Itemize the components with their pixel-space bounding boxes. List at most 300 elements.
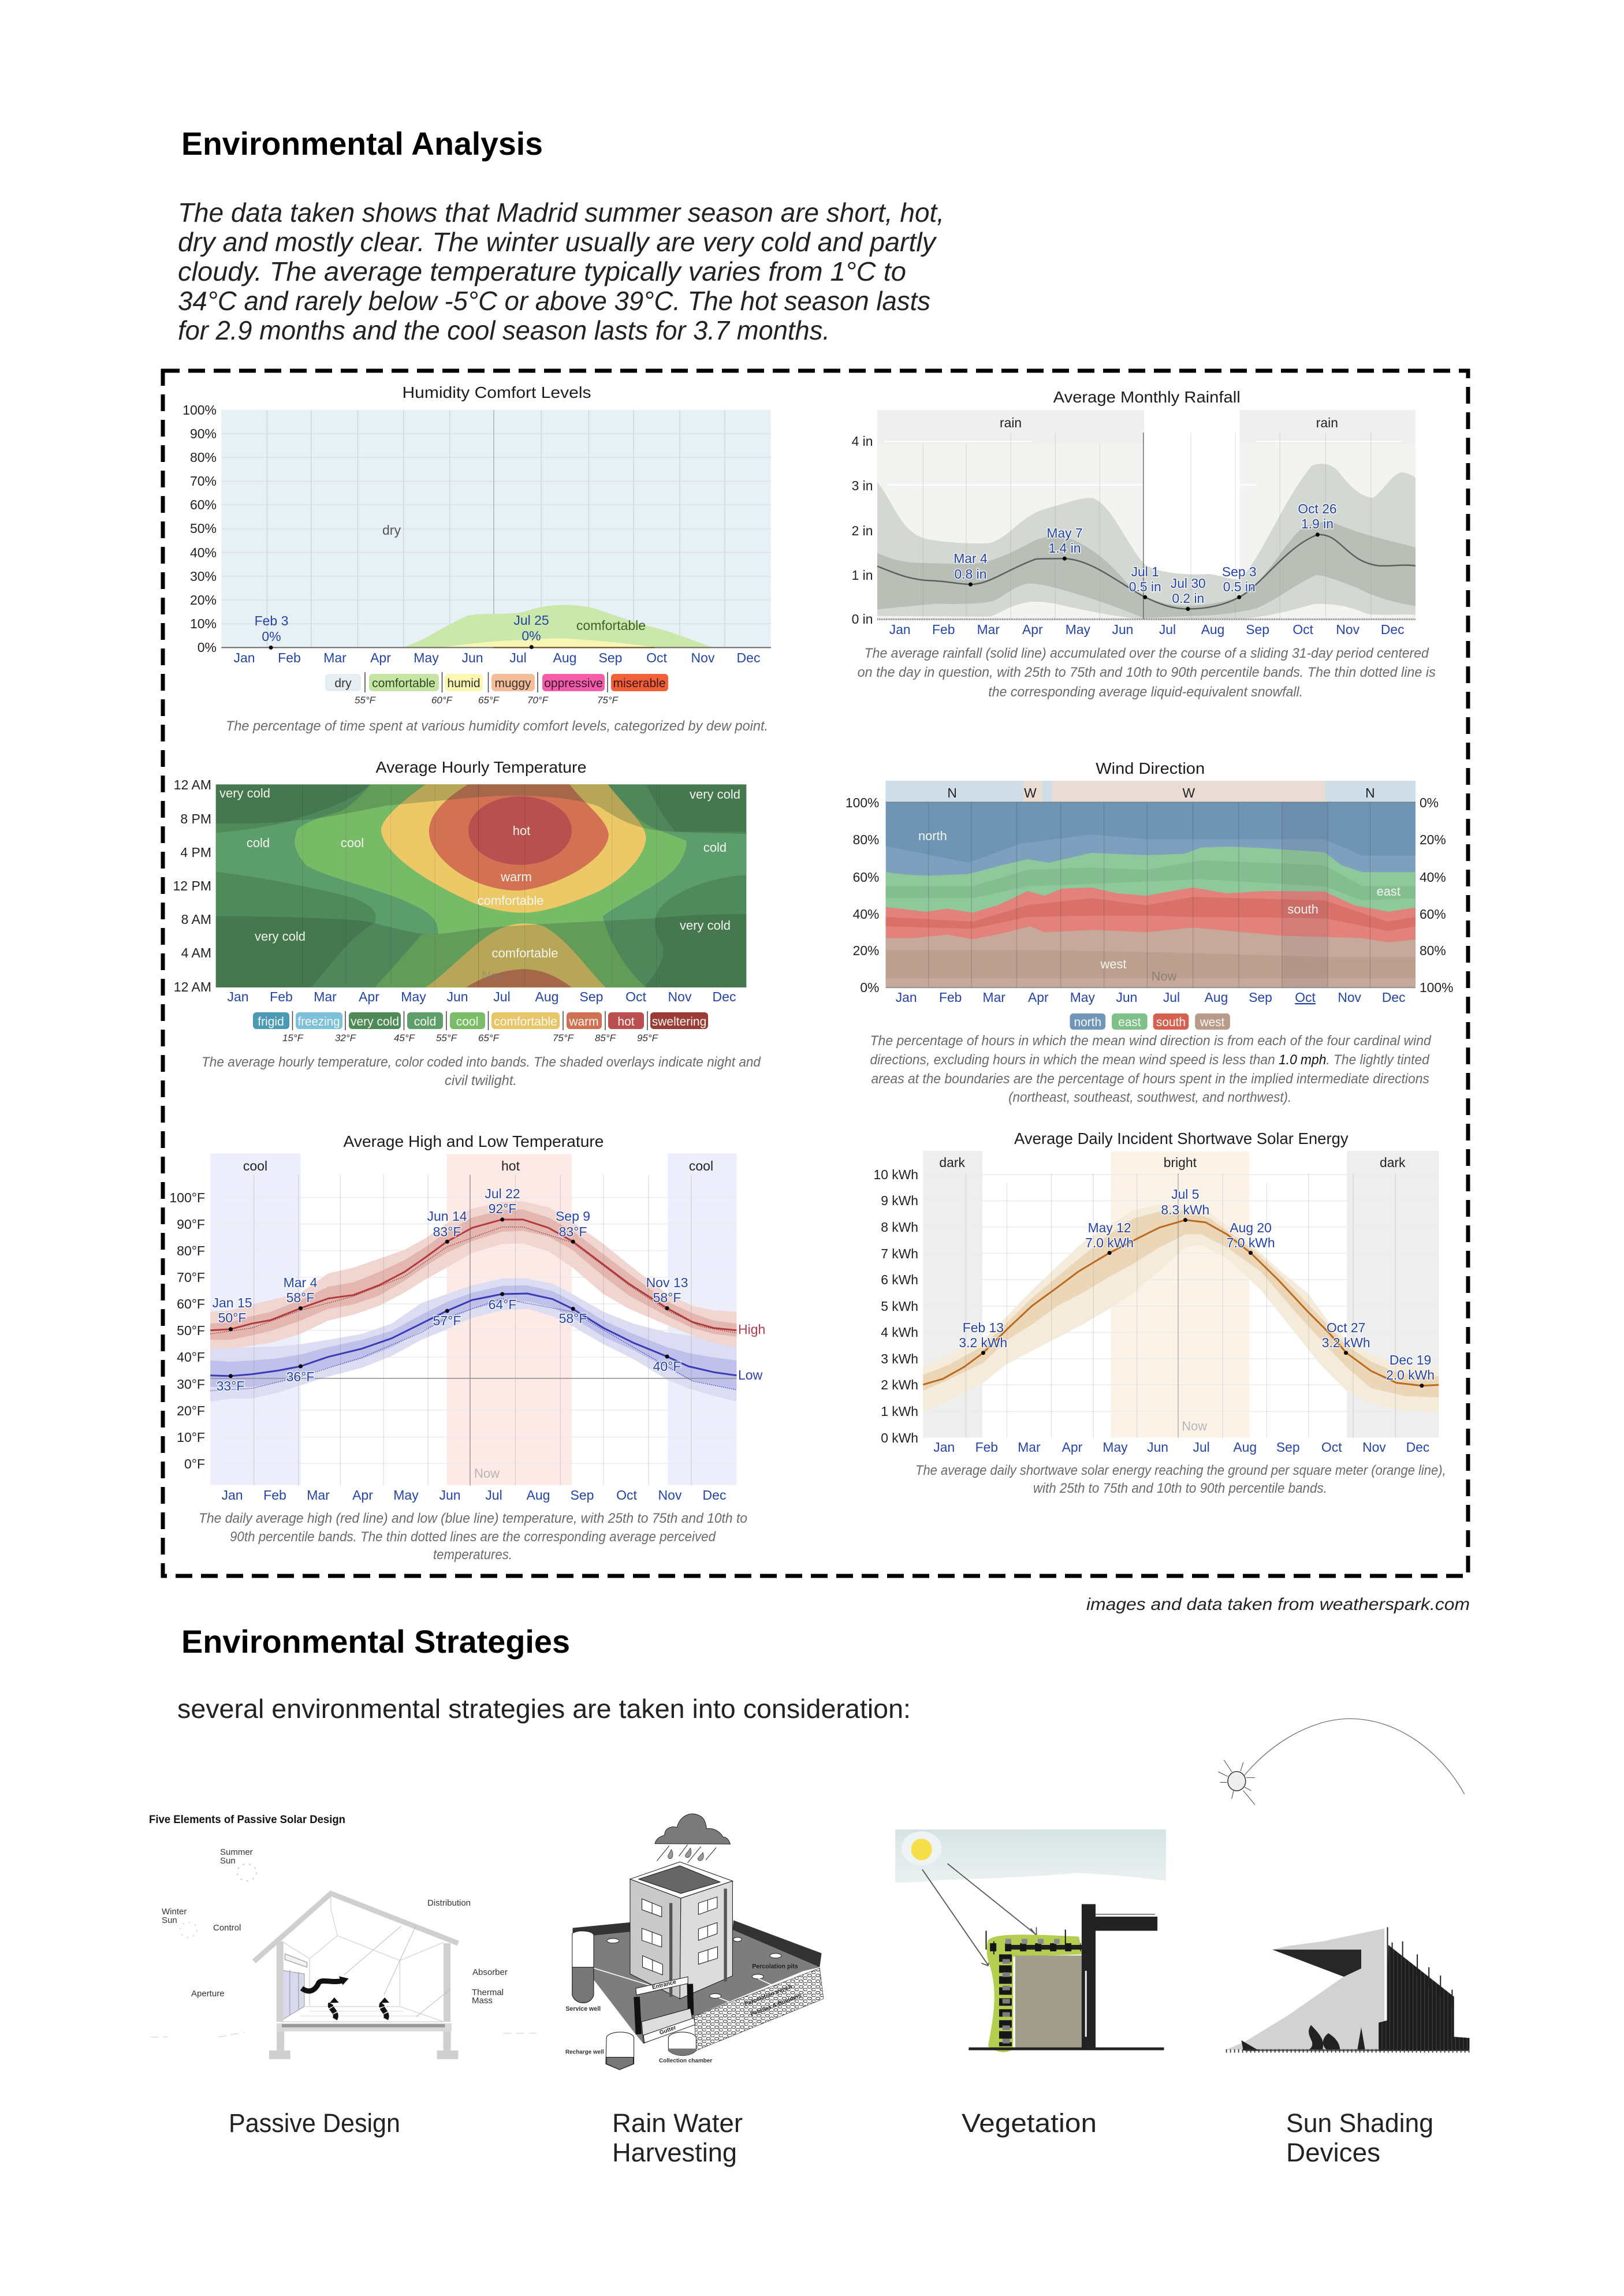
solar energy chart — [923, 1151, 1439, 1438]
intro text block: dry and mostly clear. The winter usually are very cold and partly — [178, 227, 937, 257]
chart title: hourly temperature: Average Hourly Temperature — [375, 758, 587, 776]
rainfall y axis: 2 in — [852, 523, 873, 538]
rainfall annotations: Jul 30 — [1171, 576, 1206, 591]
intro text block — [178, 197, 944, 345]
humidity y axis: 80% — [190, 450, 217, 465]
hourly band labels: comfortable — [478, 893, 543, 908]
heading: Environmental Analysis: Environmental Analysis — [181, 125, 543, 162]
solar months — [933, 1440, 1429, 1455]
rain diagram labels: Collection chamber — [659, 2058, 712, 2064]
wind left axis: 20% — [853, 943, 879, 958]
humidity legend: miserable — [613, 677, 666, 690]
rain diagram labels: Pebbles & Boulders — [750, 1992, 803, 2018]
wind left axis — [845, 795, 879, 995]
hourly caption: civil twilight. — [445, 1073, 517, 1089]
passive design diagram labels: Thermal — [472, 1988, 504, 1997]
solar y axis: 9 kWh — [881, 1193, 918, 1208]
wind header band: N — [1365, 785, 1375, 800]
wind months: Jun — [1116, 990, 1137, 1005]
solar y axis: 1 kWh — [881, 1404, 918, 1419]
solar months: Mar — [1018, 1440, 1041, 1455]
hourly months: Mar — [314, 989, 337, 1004]
heading: Environmental Strategies: Environmental Strategies — [181, 1623, 570, 1660]
humidity y axis: 50% — [190, 521, 217, 536]
wind header band: W — [1182, 785, 1195, 800]
wind caption: areas at the boundaries are the percentage of hours spent in the implied intermediate directions — [871, 1071, 1429, 1087]
hourly months: Aug — [535, 989, 558, 1004]
high low annotations: 83°F — [559, 1224, 587, 1239]
intro text block: The data taken shows that Madrid summer season are short, hot, — [178, 197, 944, 228]
hourly y axis: 4 AM — [181, 945, 211, 960]
wind direction labels: north — [918, 829, 947, 843]
solar y axis: 3 kWh — [881, 1351, 918, 1366]
high low y axis: 60°F — [177, 1296, 205, 1311]
solar y axis: 0 kWh — [881, 1430, 918, 1445]
rainfall annotations: Jul 1 — [1131, 564, 1159, 579]
high low y axis: 10°F — [177, 1430, 205, 1445]
wind months: Mar — [983, 990, 1005, 1005]
high low annotations: Low — [738, 1367, 763, 1382]
solar y axis: 4 kWh — [881, 1325, 918, 1340]
solar months: Jan — [933, 1440, 955, 1455]
wind left axis: 0% — [860, 980, 879, 995]
wind left axis: 80% — [853, 832, 879, 847]
wind direction labels: south — [1287, 902, 1318, 916]
rainfall season labels: rain — [1316, 415, 1338, 430]
high low annotations: 36°F — [286, 1369, 314, 1384]
rainfall months: Aug — [1201, 622, 1224, 637]
hourly legend: cool — [456, 1015, 478, 1028]
humidity legend: oppressive — [544, 677, 603, 690]
panel: average hourly temperature — [173, 758, 761, 1089]
rainfall annotations: 0.5 in — [1223, 579, 1256, 594]
solar caption — [915, 1463, 1446, 1496]
wind right axis: 0% — [1420, 795, 1439, 810]
rainfall y axis: 0 in — [852, 612, 873, 627]
hourly legend: frigid — [258, 1015, 284, 1028]
wind months: Nov — [1338, 990, 1362, 1005]
strategy label: vegetation: Vegetation — [962, 2108, 1097, 2138]
humidity legend — [325, 672, 668, 706]
rainfall months: Apr — [1022, 622, 1043, 637]
rainfall y axis: 3 in — [852, 478, 873, 493]
high low annotations: Jan 15 — [212, 1295, 252, 1310]
passive design diagram labels — [149, 1814, 508, 2006]
rainfall months: Dec — [1381, 622, 1405, 637]
solar annotations: Aug 20 — [1230, 1220, 1272, 1235]
hourly band labels: cold — [247, 836, 270, 850]
rainfall annotations: 0.2 in — [1172, 591, 1204, 606]
wind left axis: 60% — [853, 870, 879, 885]
hourly legend: 75°F — [553, 1033, 575, 1043]
solar months: Aug — [1233, 1440, 1257, 1455]
wells — [572, 1931, 696, 2070]
humidity annotations — [255, 523, 646, 644]
hourly legend: 32°F — [335, 1033, 357, 1043]
hourly legend: sweltering — [652, 1015, 706, 1028]
high low y axis: 30°F — [177, 1377, 205, 1392]
rainfall caption: on the day in question, with 25th to 75th and 10th to 90th percentile bands. The thin dotted line is — [858, 665, 1436, 680]
wind legend: south — [1156, 1016, 1186, 1029]
wind months — [896, 990, 1406, 1005]
passive design diagram labels: Distribution — [427, 1898, 471, 1908]
solar annotations: Dec 19 — [1390, 1352, 1431, 1367]
illustration: vegetation — [895, 1829, 1166, 2052]
site ground and back walls — [573, 1920, 822, 2044]
humidity months: Feb — [278, 650, 301, 665]
solar season labels: dark — [1380, 1155, 1406, 1170]
rainfall months — [889, 622, 1405, 637]
humidity legend: comfortable — [372, 677, 435, 690]
strategies intro text: several environmental strategies are taken into consideration: — [177, 1694, 911, 1724]
illustration: sun shading devices — [1218, 1719, 1469, 2051]
solar y axis: 5 kWh — [881, 1299, 918, 1314]
humidity months: Oct — [646, 650, 667, 665]
rainfall months: May — [1066, 622, 1091, 637]
solar y axis: 10 kWh — [874, 1167, 918, 1182]
strategy label: sun shading devices — [1286, 2108, 1433, 2167]
solar annotations: 2.0 kWh — [1386, 1367, 1435, 1382]
high low months: May — [393, 1488, 419, 1503]
wind legend: north — [1074, 1016, 1101, 1029]
hourly y axis: 8 AM — [181, 912, 211, 927]
hourly months: Apr — [359, 989, 379, 1004]
hourly months: Oct — [625, 989, 646, 1004]
intro text block: cloudy. The average temperature typically varies from 1°C to — [178, 256, 906, 286]
humidity months: Dec — [737, 650, 760, 665]
high low annotations: 58°F — [286, 1290, 314, 1305]
high low annotations: 83°F — [433, 1224, 461, 1239]
wind right axis: 20% — [1420, 832, 1446, 847]
rainfall months: Nov — [1336, 622, 1360, 637]
rainfall annotations: 0.8 in — [955, 566, 986, 582]
wind legend: west — [1200, 1016, 1225, 1029]
solar months: Sep — [1276, 1440, 1300, 1455]
solar months: Jun — [1147, 1440, 1168, 1455]
humidity annotations: 0% — [262, 629, 281, 644]
hourly y axis — [173, 777, 211, 994]
humidity y axis: 40% — [190, 545, 217, 560]
rainfall season labels — [1000, 415, 1338, 430]
rain diagram labels — [565, 1963, 803, 2064]
high low months: Feb — [263, 1488, 286, 1503]
wind direction labels: east — [1377, 884, 1400, 899]
intro text block: for 2.9 months and the cool season lasts for 3.7 months. — [178, 315, 830, 345]
hourly band labels: very cold — [255, 929, 306, 944]
wind direction labels: Now — [1152, 969, 1177, 983]
sun path arc — [1218, 1719, 1465, 1805]
wind header band: N — [947, 785, 957, 800]
humidity y axis: 10% — [190, 616, 217, 631]
high low y axis: 0°F — [184, 1456, 205, 1471]
dashed frame around charts — [163, 371, 1468, 1576]
passive design diagram labels: Five Elements of Passive Solar Design — [149, 1814, 345, 1826]
high low months: Jan — [221, 1488, 243, 1503]
high low annotations: 50°F — [218, 1310, 246, 1325]
high low annotations: Jun 14 — [427, 1209, 467, 1224]
shading building — [1226, 1927, 1469, 2051]
solar annotations — [959, 1187, 1435, 1433]
chart title: humidity: Humidity Comfort Levels — [402, 383, 591, 401]
high low caption: temperatures. — [433, 1547, 512, 1563]
hourly legend: 85°F — [595, 1033, 617, 1043]
high low annotations: 33°F — [217, 1378, 244, 1393]
rainfall annotations: Mar 4 — [953, 551, 988, 566]
passive design diagram labels: Mass — [472, 1996, 493, 2006]
humidity caption: The percentage of time spent at various humidity comfort levels, categorized by dew point. — [226, 718, 768, 734]
rain diagram labels: Percolation trench — [744, 1984, 793, 2007]
high low annotations: 64°F — [489, 1297, 516, 1312]
passive design diagram labels: Summer — [220, 1847, 253, 1857]
high low annotations: 57°F — [433, 1313, 461, 1328]
humidity legend: 75°F — [597, 695, 619, 706]
humidity annotations: Jul 25 — [513, 613, 549, 628]
rainfall y axis — [852, 434, 873, 627]
wind direction labels: west — [1100, 957, 1127, 971]
rain diagram labels: Entrance — [651, 1979, 677, 1991]
rainfall annotations: 1.4 in — [1049, 541, 1081, 556]
high low season labels: cool — [689, 1158, 713, 1173]
solar months: Dec — [1406, 1440, 1429, 1455]
solar months: Apr — [1062, 1440, 1083, 1455]
hourly legend: hot — [617, 1015, 635, 1028]
hourly caption — [202, 1054, 761, 1089]
high low y axis — [169, 1190, 205, 1471]
hourly months: May — [401, 989, 426, 1004]
solar annotations: Feb 13 — [963, 1320, 1004, 1335]
rainfall months: Jul — [1159, 622, 1176, 637]
wind right axis: 60% — [1420, 907, 1446, 922]
rainfall months: Jan — [889, 622, 911, 637]
solar months: May — [1102, 1440, 1128, 1455]
humidity legend: 55°F — [355, 695, 377, 706]
rainfall months: Oct — [1293, 622, 1314, 637]
high low y axis: 90°F — [177, 1217, 205, 1232]
wind right axis: 100% — [1420, 980, 1453, 995]
humidity y axis: 0% — [198, 640, 217, 655]
rainfall months: Feb — [932, 622, 955, 637]
passive design diagram labels: Winter — [162, 1907, 187, 1917]
hourly legend: 95°F — [637, 1033, 659, 1043]
humidity legend: dry — [334, 677, 352, 690]
strategy label: passive design: Passive Design — [229, 2108, 400, 2138]
high low caption: 90th percentile bands. The thin dotted lines are the corresponding average perceived — [230, 1529, 716, 1545]
source credit: images and data taken from weatherspark.com — [1086, 1595, 1470, 1614]
humidity months: Sep — [599, 650, 622, 665]
solar annotations: 3.2 kWh — [1322, 1335, 1370, 1350]
humidity legend: muggy — [494, 677, 531, 690]
high low months: Aug — [527, 1488, 550, 1503]
strategy label: sun shading devices: Devices — [1286, 2138, 1380, 2167]
rainfall annotations: 0.5 in — [1129, 579, 1161, 594]
hourly caption: The average hourly temperature, color coded into bands. The shaded overlays indicate night and — [202, 1054, 761, 1070]
hourly band labels: cool — [341, 836, 364, 850]
high low months: Sep — [571, 1488, 594, 1503]
hourly months: Jul — [493, 989, 511, 1004]
wind legend: east — [1118, 1016, 1141, 1029]
hourly months: Nov — [668, 989, 692, 1004]
humidity legend: humid — [447, 677, 481, 690]
high low season labels: hot — [501, 1158, 520, 1173]
chart title: wind: Wind Direction — [1096, 759, 1205, 777]
rainfall season labels: rain — [1000, 415, 1022, 430]
solar months: Oct — [1321, 1440, 1342, 1455]
high low y axis: 20°F — [177, 1403, 205, 1418]
wind left axis: 40% — [853, 907, 879, 922]
humidity y axis: 70% — [190, 474, 217, 489]
building — [630, 1862, 732, 1999]
hourly band labels: hot — [513, 823, 530, 838]
panel: solar energy — [874, 1130, 1446, 1496]
hourly band labels — [219, 786, 740, 983]
solar caption: The average daily shortwave solar energy reaching the ground per square meter (orange line), — [915, 1463, 1446, 1478]
hourly months — [227, 989, 736, 1004]
high low y axis: 70°F — [177, 1270, 205, 1285]
humidity months — [233, 650, 760, 665]
rainfall annotations: May 7 — [1046, 525, 1083, 541]
wind caption — [870, 1033, 1431, 1105]
solar y axis: 2 kWh — [881, 1377, 918, 1392]
solar annotations: Jul 5 — [1171, 1187, 1199, 1202]
hourly legend: comfortable — [494, 1015, 557, 1028]
rainfall caption — [858, 646, 1436, 700]
wind right axis: 40% — [1420, 870, 1446, 885]
solar annotations: 7.0 kWh — [1085, 1235, 1134, 1250]
high low annotations: 58°F — [559, 1311, 587, 1326]
solar y axis: 7 kWh — [881, 1246, 918, 1261]
solar y axis: 8 kWh — [881, 1220, 918, 1235]
high low months — [221, 1488, 726, 1503]
strategy label: rain water harvesting: Rain Water — [612, 2108, 743, 2138]
humidity annotations: 0% — [522, 628, 541, 643]
humidity months: Mar — [323, 650, 347, 665]
humidity annotations: dry — [382, 523, 401, 538]
solar annotations: 8.3 kWh — [1161, 1202, 1209, 1217]
humidity annotations: Feb 3 — [255, 613, 288, 628]
strategy label: rain water harvesting — [612, 2108, 743, 2167]
humidity months: Jan — [233, 650, 255, 665]
passive design house section — [151, 1864, 539, 2059]
hourly legend: very cold — [351, 1015, 399, 1028]
high low months: Mar — [307, 1488, 330, 1503]
solar months: Nov — [1362, 1440, 1386, 1455]
rain diagram labels: Percolation pits — [752, 1963, 798, 1970]
high low y axis: 40°F — [177, 1350, 205, 1365]
solar months: Jul — [1193, 1440, 1210, 1455]
humidity months: Aug — [553, 650, 576, 665]
wind months: Aug — [1205, 990, 1228, 1005]
humidity months: Nov — [691, 650, 715, 665]
humidity legend: 60°F — [431, 695, 453, 706]
wind months: Sep — [1249, 990, 1272, 1005]
wind header band — [885, 781, 1416, 802]
wind months: Jan — [896, 990, 917, 1005]
high low annotations: 92°F — [489, 1201, 516, 1216]
humidity area chart — [221, 410, 771, 647]
illustration: passive solar design — [149, 1814, 539, 2059]
hourly legend: 55°F — [436, 1033, 458, 1043]
solar season labels — [939, 1155, 1406, 1170]
humidity months: Jun — [461, 650, 483, 665]
chart title: rainfall: Average Monthly Rainfall — [1053, 388, 1241, 406]
rainfall annotations: Sep 3 — [1222, 564, 1257, 579]
high low caption — [199, 1511, 747, 1563]
entrance and gutter — [636, 1977, 695, 2043]
humidity legend: 70°F — [527, 695, 549, 706]
passive design diagram labels: Control — [213, 1923, 241, 1933]
hourly months: Feb — [270, 989, 293, 1004]
wind months: Dec — [1382, 990, 1406, 1005]
solar annotations: May 12 — [1088, 1220, 1131, 1235]
high low months: Jul — [485, 1488, 502, 1503]
humidity annotations: comfortable — [576, 618, 646, 633]
hourly legend: warm — [568, 1015, 599, 1028]
high low annotations — [212, 1186, 765, 1481]
hourly temperature heat map — [216, 784, 746, 987]
high low months: Jun — [439, 1488, 461, 1503]
wind months: May — [1070, 990, 1095, 1005]
solar annotations: 7.0 kWh — [1227, 1235, 1275, 1250]
hourly legend — [253, 1011, 708, 1043]
rainfall months: Sep — [1246, 622, 1269, 637]
solar months: Feb — [975, 1440, 998, 1455]
hourly months: Jan — [227, 989, 249, 1004]
illustration: rain water harvesting — [565, 1814, 824, 2070]
humidity y axis: 90% — [190, 426, 217, 441]
high low annotations: High — [738, 1322, 765, 1337]
high low months: Oct — [616, 1488, 637, 1503]
intro text block: 34°C and rarely below -5°C or above 39°C. The hot season lasts — [178, 286, 930, 316]
rain diagram labels: Recharge well — [565, 2049, 604, 2056]
hourly band labels: very cold — [680, 918, 731, 933]
panel: average high and low temperature — [169, 1132, 765, 1563]
rain cloud — [655, 1814, 730, 1863]
hourly band labels: comfortable — [492, 946, 558, 960]
high low annotations: Sep 9 — [556, 1209, 590, 1224]
hourly legend: freezing — [298, 1015, 340, 1028]
high low y axis: 50°F — [177, 1323, 205, 1338]
percolation trench with pebbles — [694, 1968, 824, 2051]
high low annotations: Now — [474, 1466, 500, 1481]
humidity y axis: 20% — [190, 592, 217, 607]
solar y axis: 6 kWh — [881, 1272, 918, 1287]
solar y axis — [874, 1167, 918, 1445]
rainfall months: Jun — [1112, 622, 1133, 637]
wind right axis: 80% — [1420, 943, 1446, 958]
rainfall caption: the corresponding average liquid-equivalent snowfall. — [988, 684, 1303, 700]
wind stacked area chart — [886, 802, 1416, 987]
solar caption: with 25th to 75th and 10th to 90th percentile bands. — [1033, 1481, 1327, 1496]
wind right axis — [1420, 795, 1453, 995]
rainfall y axis: 4 in — [852, 434, 873, 449]
humidity y axis — [182, 402, 217, 655]
wind months: Oct — [1295, 990, 1316, 1005]
panel: humidity comfort levels — [182, 383, 771, 734]
wind caption: directions, excluding hours in which the mean wind speed is less than 1.0 mph. The lightly tinted — [870, 1052, 1429, 1068]
wind header band: W — [1024, 785, 1037, 800]
rainfall months: Mar — [977, 622, 1000, 637]
strategy label: sun shading devices: Sun Shading — [1286, 2108, 1433, 2138]
solar annotations: 3.2 kWh — [959, 1335, 1007, 1350]
wind direction labels — [918, 829, 1400, 983]
solar season labels: dark — [939, 1155, 965, 1170]
hourly months: Dec — [713, 989, 736, 1004]
rainfall annotations: Oct 26 — [1298, 501, 1337, 516]
solar season labels: bright — [1164, 1155, 1197, 1170]
high low annotations: 58°F — [653, 1290, 681, 1305]
high low months: Dec — [703, 1488, 726, 1503]
humidity legend: 65°F — [478, 695, 500, 706]
